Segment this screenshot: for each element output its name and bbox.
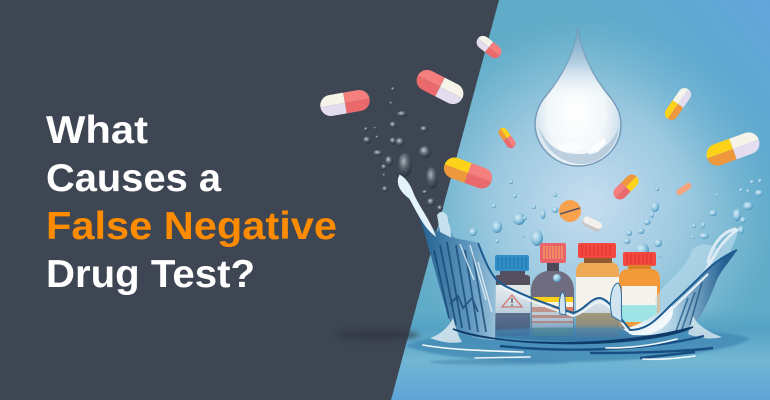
splash: left tip highlights — [399, 176, 434, 234]
title line: What: What — [46, 109, 148, 152]
title line: Drug Test?: Drug Test? — [46, 253, 255, 296]
splash: dark base line — [453, 327, 693, 344]
background: top right tint — [390, 0, 770, 400]
splash: right tendrils — [706, 229, 737, 270]
water drop — [535, 28, 621, 166]
pill capsule: small left of drop — [498, 128, 516, 148]
splash: right wall dark streaks — [676, 282, 702, 331]
bottle: red cap with white label — [576, 243, 619, 337]
title line: False Negative: False Negative — [46, 205, 337, 248]
bottle: coral cap with striped contents — [531, 243, 574, 337]
splash: wave crest — [478, 243, 737, 330]
dark left panel — [0, 0, 499, 400]
splash: water pool — [405, 327, 750, 362]
title line: Causes a: Causes a — [46, 157, 221, 200]
splash: left base mound — [430, 318, 462, 343]
orange round tablet — [559, 200, 581, 222]
icon: warning triangle — [502, 295, 522, 307]
splash: spout above left wall — [437, 212, 452, 238]
splash: white foam at crown front — [625, 306, 673, 335]
splash: small spout by bottle — [559, 292, 566, 315]
bottle: blue cap with warning label — [495, 255, 530, 336]
splash: left wall dark streaks — [434, 242, 486, 332]
splash: transparent front water — [455, 283, 695, 341]
water splash crown — [398, 176, 750, 365]
pill capsule: orange and coral on panel edge — [444, 158, 492, 188]
white tablet — [581, 215, 603, 233]
pill capsule: small top — [476, 36, 502, 58]
splash: left wall — [398, 176, 496, 340]
pill capsule: tiny peach — [675, 182, 693, 196]
pill capsule: far left — [320, 90, 370, 116]
pill capsule: small upper right — [664, 88, 692, 120]
splash: right base mound — [688, 316, 722, 338]
title — [46, 109, 337, 296]
splash: translucent right back wave — [655, 230, 738, 325]
bottles — [495, 243, 660, 337]
pill capsule: upper left — [416, 70, 464, 104]
splash: white crest highlight — [500, 274, 708, 333]
bottle: orange with cyan label — [619, 252, 660, 330]
droplets on blue background — [469, 179, 763, 258]
water ripple shadow — [430, 359, 570, 365]
splash: white ripples — [423, 339, 695, 359]
pill capsule: large right — [706, 132, 760, 166]
splash: right wall — [623, 250, 737, 335]
water surface — [380, 310, 770, 400]
splash: left wall light streaks — [460, 244, 492, 312]
splash: dark ripples — [500, 336, 713, 358]
droplets on dark panel — [363, 87, 443, 211]
pill capsule: coral and orange centre — [614, 174, 638, 200]
splash: centre spout — [610, 283, 622, 322]
water shadow on the dark panel — [336, 331, 420, 339]
